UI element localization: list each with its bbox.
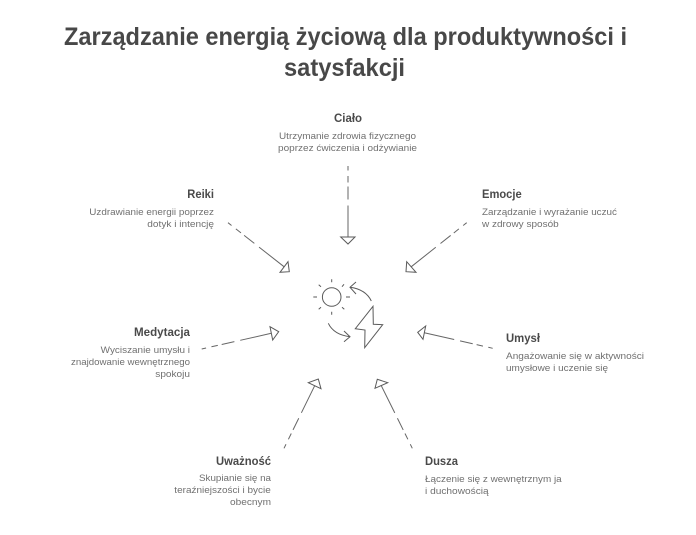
label: Ciało: Ciało: [334, 111, 362, 125]
arrow: Reiki: [228, 223, 289, 272]
central icon: sun and lightning bolt cycle: [313, 279, 383, 348]
label: Uważność: obecnym: [230, 497, 271, 508]
arrow: Ciało: [341, 166, 355, 244]
label: Ciało: poprzez ćwiczenia i odżywianie: [278, 143, 417, 154]
label: Dusza: Łączenie się z wewnętrznym ja: [425, 474, 562, 485]
label: Emocje: [481, 187, 617, 230]
label: Uważność: [174, 454, 272, 508]
icon: curved arrow from sun to bolt: [328, 323, 350, 342]
label: Dusza: Dusza: [425, 454, 458, 468]
label: Medytacja: spokoju: [155, 369, 190, 380]
label: Umysł: Angażowanie się w aktywności: [506, 351, 644, 362]
title: satysfakcji: [284, 54, 405, 82]
arrow: Emocje: [406, 223, 467, 272]
title: [64, 23, 627, 82]
arrow: Medytacja: [202, 327, 279, 349]
label: Emocje: w zdrowy sposób: [481, 219, 559, 230]
label: Umysł: Umysł: [506, 331, 541, 345]
label: Umysł: umysłowe i uczenie się: [506, 363, 608, 374]
label: Uważność: Skupianie się na: [199, 473, 272, 484]
label: Medytacja: [71, 325, 190, 380]
arrow: Dusza: [375, 379, 412, 448]
label: Reiki: Reiki: [187, 187, 214, 201]
label: Reiki: dotyk i intencję: [147, 219, 214, 230]
label: Reiki: Uzdrawianie energii poprzez: [89, 207, 214, 218]
label: Medytacja: znajdowanie wewnętrznego: [71, 357, 190, 368]
label: Medytacja: Wyciszanie umysłu i: [101, 345, 190, 356]
label: Emocje: Emocje: [482, 187, 522, 201]
title: Zarządzanie energią życiową dla produktywności i: [64, 23, 627, 51]
arrow: Uważność: [284, 379, 321, 448]
icon: sun: [313, 279, 350, 315]
label: Dusza: i duchowością: [425, 486, 489, 497]
icon: lightning bolt: [355, 306, 383, 348]
label: Uważność: Uważność: [216, 454, 271, 468]
arrow: Umysł: [418, 326, 493, 348]
label: Umysł: [506, 331, 644, 374]
label: Uważność: teraźniejszości i bycie: [174, 485, 271, 496]
label: Reiki: [89, 187, 214, 230]
label: Medytacja: Medytacja: [134, 325, 190, 339]
label: Ciało: Utrzymanie zdrowia fizycznego: [279, 131, 416, 142]
label: Emocje: Zarządzanie i wyrażanie uczuć: [482, 207, 617, 218]
label: Dusza: [425, 454, 562, 497]
icon: curved arrow from bolt to sun: [350, 282, 371, 301]
label: Ciało: [278, 111, 417, 154]
